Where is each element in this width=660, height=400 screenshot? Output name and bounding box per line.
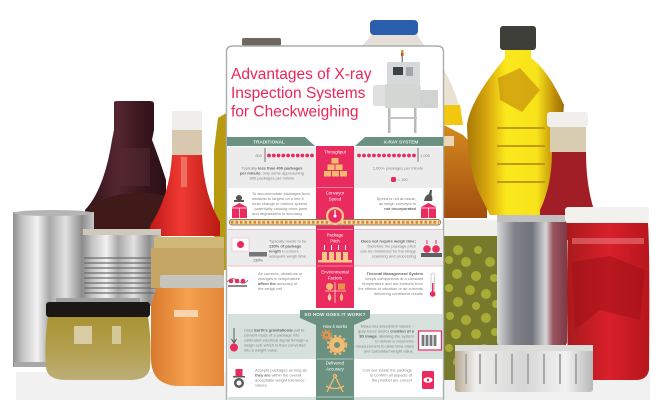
orange jar (151, 288, 224, 386)
label: environmental factors (321, 270, 349, 280)
environmental: traditional text: affect the accuracy of (258, 281, 298, 286)
package pitch: x-ray text (360, 238, 417, 258)
panel: infographic card (226, 46, 444, 400)
icon: can with eye (422, 371, 434, 389)
legend: dot equals 100: = 100 (398, 177, 408, 182)
icon: packages on belt (318, 245, 352, 262)
conveyor: traditional text: To accommodate packages from (252, 191, 310, 196)
icon: weighing scale (233, 369, 245, 388)
how it works: traditional text: convert mass of a package into (244, 332, 300, 338)
conveyor: traditional text: and degradation in accuracy (252, 211, 302, 216)
environmental: traditional text: Air currents, vibrations or (258, 271, 303, 276)
package pitch: x-ray text: Does not require weigh time; (361, 238, 416, 244)
label: conveyor speed (326, 190, 345, 202)
how it works: traditional text: into a weight value. (244, 348, 278, 352)
how it works: x-ray text: Measures absorption values – (361, 324, 415, 328)
title: Advantages of X-ray (231, 66, 372, 83)
yellow bottle behind (214, 112, 228, 270)
conveyor: traditional text: - potentially causing more jams (252, 206, 307, 211)
conveyor: x-ray text: as weigh conveyor is (379, 201, 416, 206)
how it works: traditional text: Uses Earth's gravitational pull to (244, 328, 305, 332)
right ketchup bottle (550, 127, 586, 152)
title: Inspection Systems (231, 85, 366, 102)
dark sauce bottle (85, 101, 166, 235)
banner: so how does it work: SO HOW DOES IT WORK? (304, 312, 366, 317)
how it works: traditional text: weigh cell, which is then converted (244, 342, 306, 348)
icon: environmental factors (325, 282, 346, 303)
oil bottle (467, 50, 564, 215)
environmental: traditional text (258, 271, 303, 291)
label: how it works: How it works (323, 324, 347, 329)
throughput: traditional chart (255, 148, 314, 162)
package pitch: traditional text: Typically needs to be (269, 238, 307, 244)
label: delivered accuracy: Accuracy (326, 366, 345, 372)
accuracy: traditional text: acceptable weight tolerance (255, 378, 305, 382)
package pitch: traditional icon: 130% (253, 258, 264, 262)
package pitch: traditional text: length to ensure (269, 248, 300, 254)
label: delivered accuracy: Delivered (326, 360, 345, 366)
conveyor: traditional text: smallest to largest on a line it (252, 196, 304, 201)
gold-lid jar (151, 248, 224, 288)
conveyor: traditional text: must change to various speeds (252, 201, 307, 206)
conveyor: x-ray text (377, 196, 417, 211)
label: environmental factors: Factors (328, 276, 342, 280)
grey cap behind panel (242, 38, 281, 46)
red pepper jar (567, 223, 649, 380)
environmental: x-ray text: temperature and are immune from (362, 281, 424, 286)
conveyor: x-ray text: Speed is not an issue, (377, 196, 416, 201)
icon: snail on box (232, 195, 247, 218)
hot sauce bottle (172, 130, 202, 155)
heading: traditional (227, 137, 315, 146)
environmental: x-ray text: keeps components at a constant (365, 276, 424, 281)
label: conveyor speed: Speed (329, 196, 342, 202)
environmental: x-ray text: delivering consistent results (374, 291, 423, 296)
icon: stacked boxes (324, 158, 347, 176)
throughput: traditional text: 800 packages per minute (250, 176, 295, 180)
throughput: x-ray chart: 1,000 (420, 153, 431, 158)
heading: traditional: TRADITIONAL (253, 139, 285, 144)
how it works: x-ray text: 3D image, allowing the system (359, 334, 415, 338)
environmental: x-ray text: the effects of vibration or air currents (358, 286, 423, 291)
title: for Checkweighing (231, 104, 359, 120)
icon: thermometer (430, 273, 436, 297)
mustard jar (45, 316, 151, 380)
environmental: traditional text: changes in temperature (258, 276, 301, 281)
package pitch: x-ray text: scanning and processing (372, 254, 416, 258)
sardine tin (455, 345, 593, 392)
ribbed silver can (83, 230, 161, 306)
accuracy: traditional text: values. (255, 382, 268, 388)
how it works: traditional text (244, 328, 309, 352)
how it works: traditional icon (230, 328, 238, 352)
accuracy: traditional text (255, 368, 307, 388)
how it works: traditional text: calibrated electrical signal through a (244, 338, 309, 342)
how it works: x-ray text (356, 324, 415, 354)
label: package pitch: Pitch (330, 238, 340, 244)
icon: compass (326, 374, 344, 392)
throughput: traditional text: per minute; only some approaching (240, 170, 304, 176)
package pitch: x-ray text: therefore the package pitch (368, 244, 416, 248)
blue-capped bottle (362, 33, 425, 46)
icon: x-ray image (418, 331, 442, 350)
icon: rabbit on box (421, 190, 436, 218)
accuracy: x-ray text (363, 368, 413, 382)
throughput: traditional text (240, 166, 304, 180)
how it works: x-ray text: and calculated weight value. (364, 348, 414, 354)
accuracy: traditional text: Accepts packages as long as (255, 368, 307, 372)
throughput: traditional text: Typically less than 400 packages (242, 166, 303, 170)
photo: food containers right of the panel (242, 20, 649, 392)
conveyor: x-ray text: not incorporated (384, 206, 417, 211)
amber bottle (444, 125, 487, 218)
throughput: x-ray text: 1,000+ packages per minute (373, 166, 424, 170)
silver can (497, 216, 567, 346)
accuracy: x-ray text: to confirm all aspects of (370, 372, 413, 378)
icon: x-ray inspection machine (373, 50, 438, 133)
panel: centre column (316, 146, 354, 400)
banner: so how does it work (300, 310, 370, 325)
how it works: x-ray text: measurement to determine mass (356, 344, 414, 348)
conveyor: traditional text (252, 191, 310, 216)
environmental: x-ray text (358, 271, 424, 296)
icon: vibration on belt (227, 279, 248, 287)
environmental: traditional text: the weigh cell (258, 286, 282, 291)
photo: food containers left of the panel (13, 101, 228, 386)
heading: x-ray system (355, 137, 443, 146)
floor reflection (16, 372, 650, 400)
accuracy: x-ray text: Can see inside the package (363, 368, 413, 372)
white shoulder of bottle (444, 70, 459, 105)
label: conveyor speed: Conveyor (326, 190, 345, 196)
yellow cap (444, 105, 463, 125)
label: throughput: Throughput (324, 150, 347, 154)
package pitch: traditional text: 130% of package (269, 244, 302, 248)
package pitch: x-ray text: can be minimized for the image (360, 248, 417, 254)
tall silver can (13, 212, 94, 367)
accuracy: x-ray text: the product are correct (372, 378, 413, 382)
label: package pitch: Package (327, 232, 344, 238)
panel: row backgrounds (228, 147, 443, 400)
package pitch: traditional text: adequate weigh time (269, 254, 307, 258)
how it works: x-ray text: gray tones and/or creation of a (358, 328, 415, 334)
conveyor belt (229, 219, 441, 226)
package pitch: traditional icon (232, 238, 267, 262)
environmental: x-ray text: Thermal Management System (367, 271, 423, 276)
label: delivered accuracy (326, 360, 345, 372)
icon: speed gauge (326, 207, 344, 225)
title (231, 66, 372, 120)
throughput: traditional chart: 800 (255, 153, 263, 158)
how it works: x-ray text: to deliver a volumetric (375, 338, 414, 344)
package pitch: traditional text (269, 238, 307, 258)
accuracy: traditional text: they are within the overall (255, 372, 301, 378)
icon: gears (322, 330, 346, 354)
heading: x-ray system: X-RAY SYSTEM (384, 139, 418, 144)
legend: dot equals 100 (391, 177, 408, 182)
label: package pitch (327, 232, 344, 244)
throughput: x-ray chart (357, 148, 431, 162)
label: environmental factors: Environmental (321, 270, 349, 274)
icon: close-pitch packages (421, 240, 442, 257)
peas jar (444, 236, 502, 380)
